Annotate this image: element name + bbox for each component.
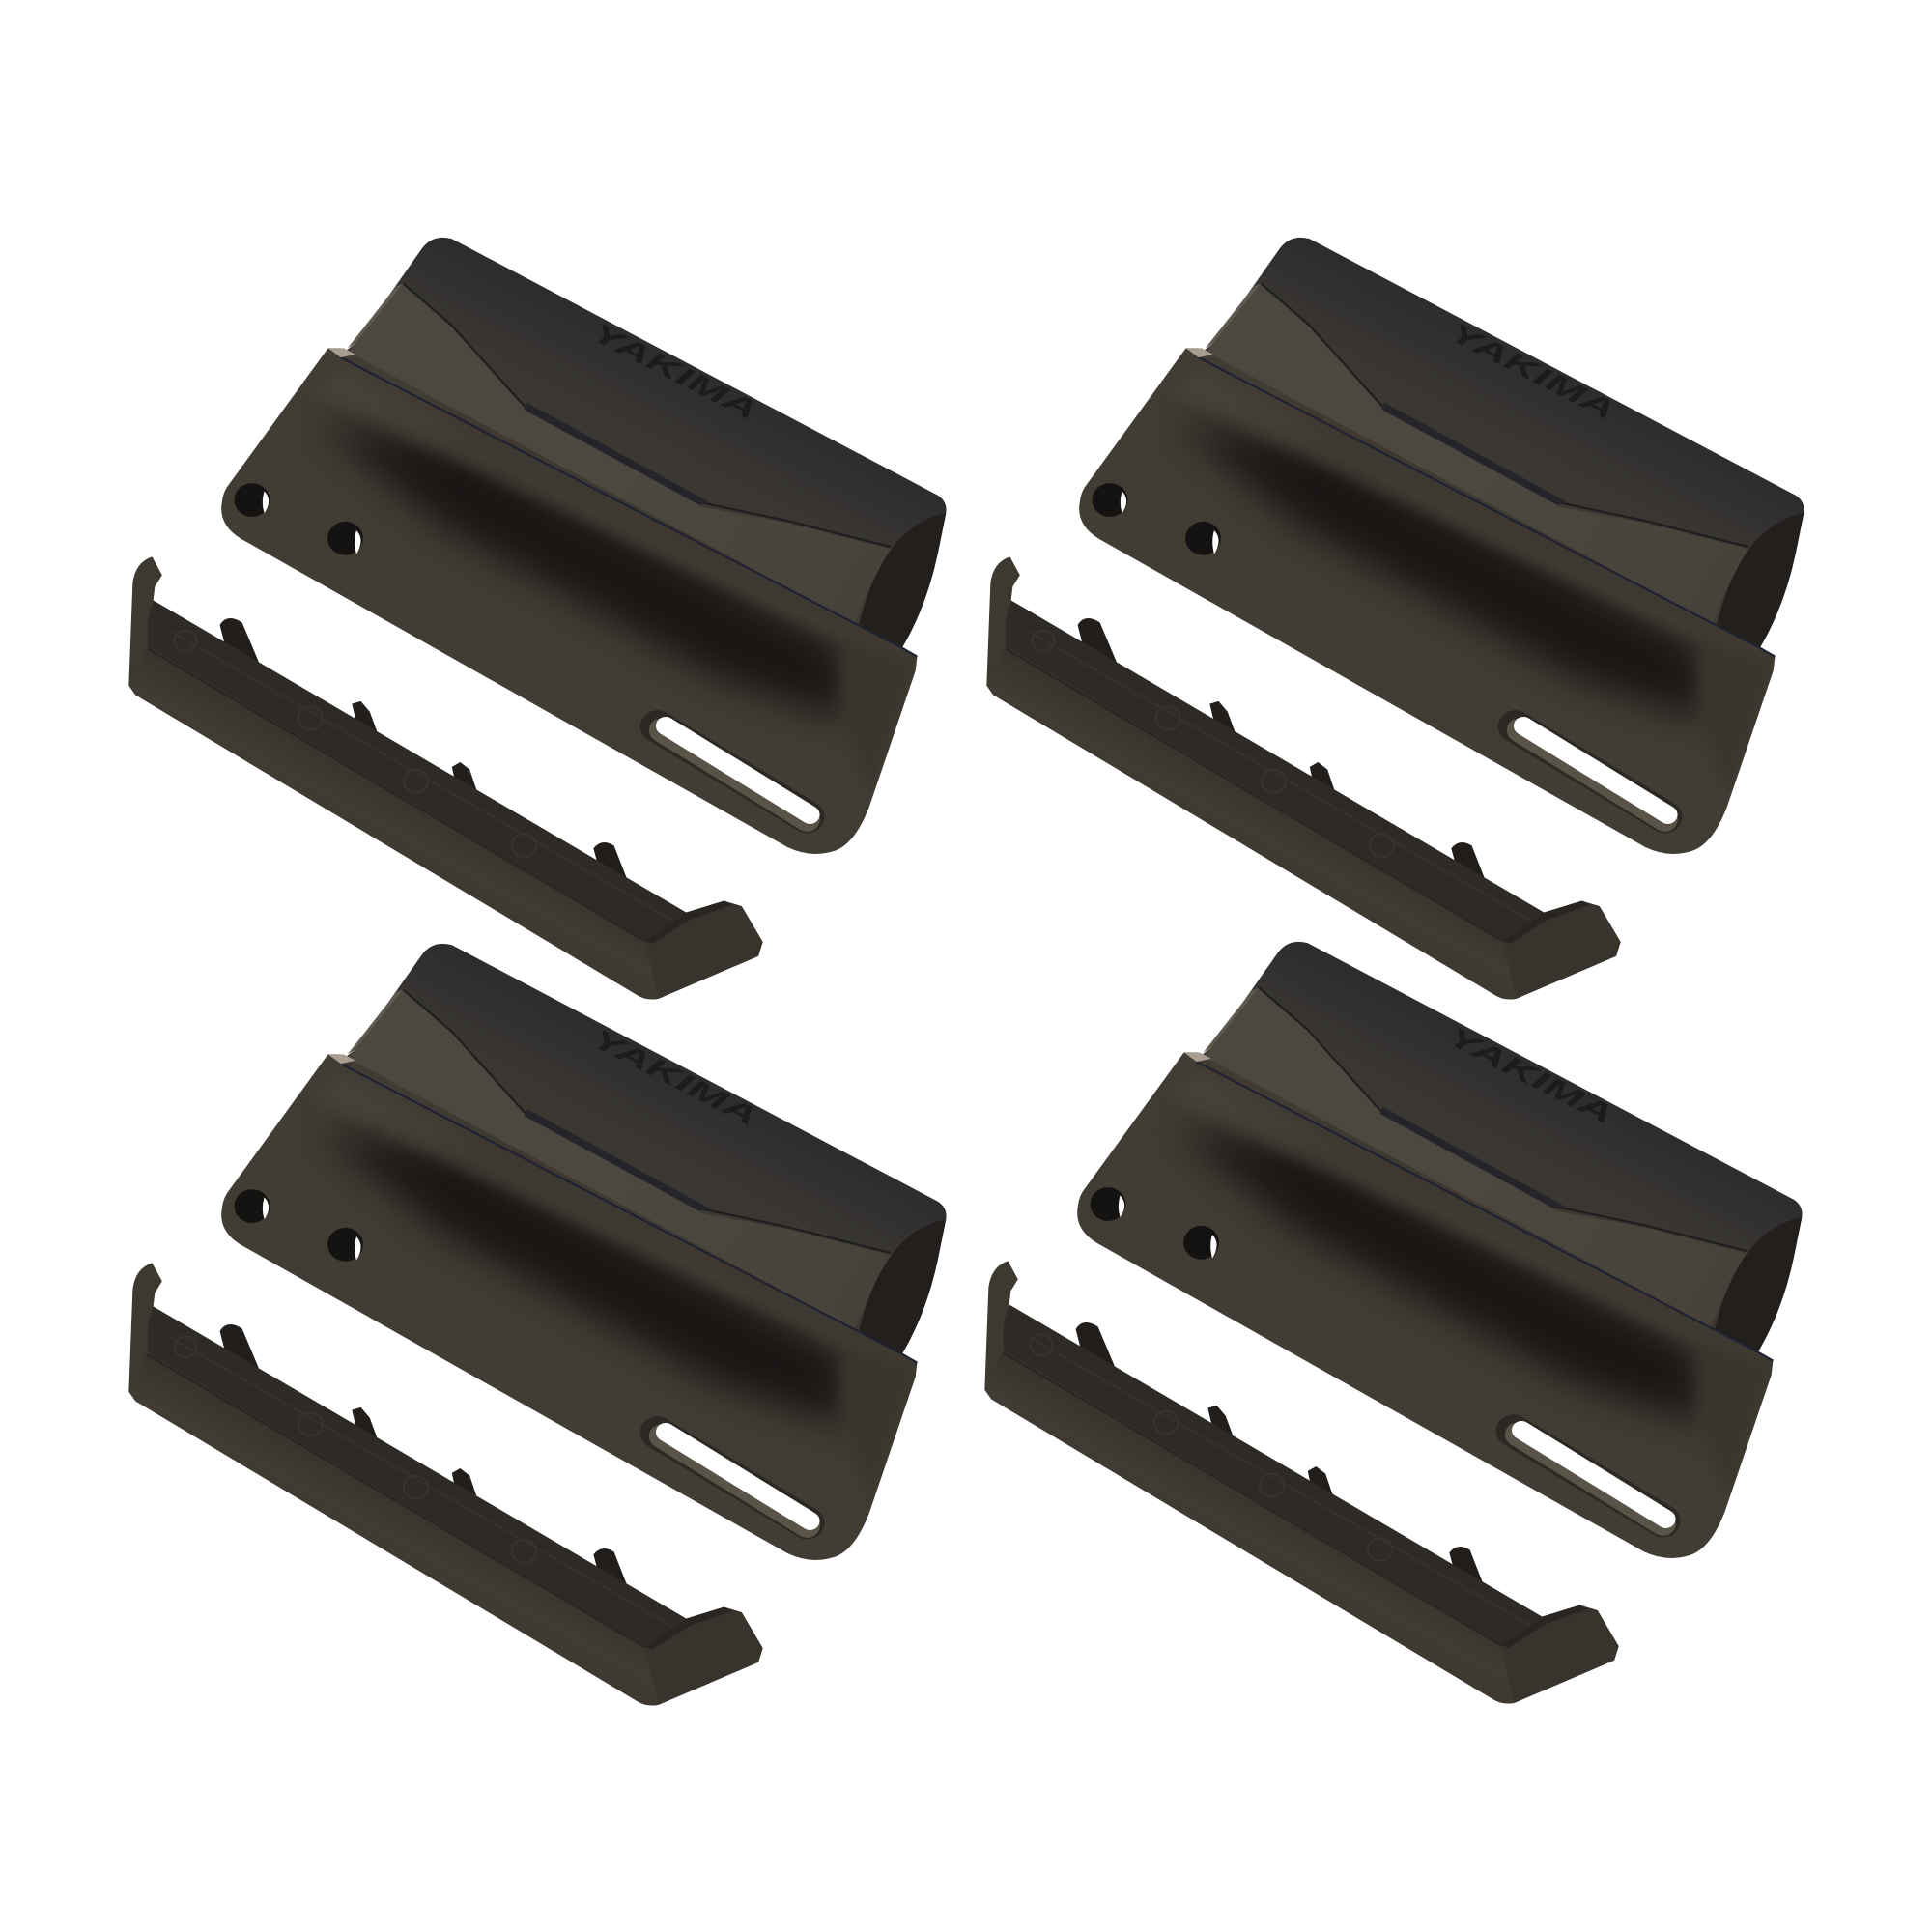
product set: bottom right <box>984 942 1803 1703</box>
product set: bottom left <box>128 944 947 1705</box>
product set: top right <box>986 238 1804 999</box>
bracket <box>221 944 947 1560</box>
logo: YAKIMA <box>586 1023 762 1131</box>
logo: YAKIMA <box>1444 317 1620 425</box>
rubber strip <box>128 1263 763 1705</box>
rubber strip <box>984 1261 1619 1703</box>
logo: YAKIMA <box>586 317 762 425</box>
bracket <box>1079 238 1804 854</box>
bracket <box>1077 942 1803 1558</box>
bracket <box>221 238 947 854</box>
rubber strip <box>128 556 763 999</box>
product set: top left <box>128 238 947 999</box>
rubber strip <box>986 556 1621 999</box>
logo: YAKIMA <box>1442 1021 1618 1129</box>
